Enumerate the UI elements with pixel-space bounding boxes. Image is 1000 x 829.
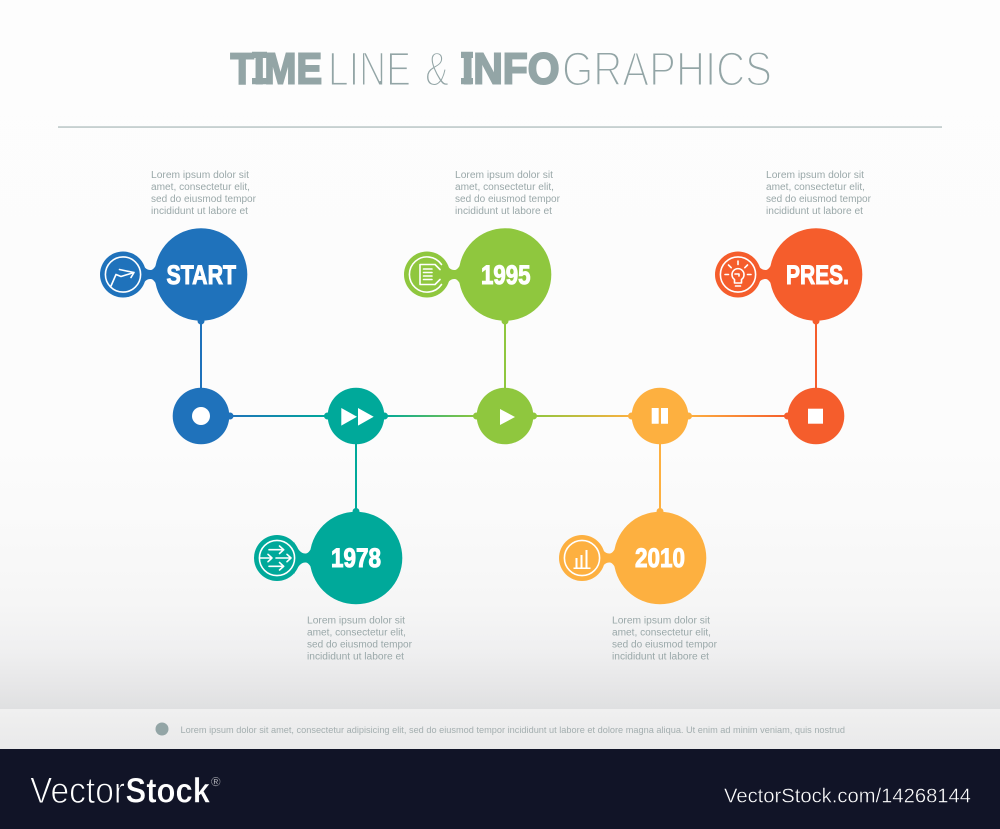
title: TIME: [230, 45, 322, 93]
title: GRAPHICS: [562, 42, 772, 96]
icon: document: [409, 257, 442, 292]
title: [230, 42, 772, 96]
description: start: sed do eiusmod tempor: [151, 194, 257, 205]
footer note bar: [0, 709, 1000, 749]
label: 1995: 1995: [481, 260, 530, 290]
title: INFO: [462, 45, 560, 93]
stem: 2010: [628, 412, 692, 515]
description: 1978: [307, 616, 413, 662]
node: fast forward: [328, 388, 384, 444]
description: start: incididunt ut labore et: [151, 206, 248, 217]
description: 1978: amet, consectetur elit,: [307, 628, 406, 638]
icon: growth chart: [105, 257, 141, 292]
node: stop: [788, 388, 844, 444]
label: start: START: [166, 260, 236, 290]
icon: light bulb: [720, 257, 756, 292]
bubble: present: [715, 228, 862, 321]
watermark band: [0, 749, 1000, 829]
panel: 1978: [254, 388, 413, 662]
description: 1995: incididunt ut labore et: [455, 206, 552, 217]
description: start: Lorem ipsum dolor sit: [151, 170, 249, 181]
description: 2010: amet, consectetur elit,: [612, 628, 711, 638]
label: 2010: 2010: [635, 543, 685, 573]
node: pause: [632, 388, 688, 444]
title: LINE: [328, 42, 411, 96]
logo: [30, 770, 221, 811]
bubble: 1978: [254, 512, 402, 604]
description: 1995: [455, 170, 561, 217]
bubble: start: [100, 228, 247, 321]
label: 1978: 1978: [331, 543, 381, 573]
description: 2010: [612, 616, 718, 662]
description: 1995: Lorem ipsum dolor sit: [455, 170, 553, 181]
image id: VectorStock.com/14268144: [724, 786, 971, 808]
description: start: [151, 170, 257, 217]
description: start: amet, consectetur elit,: [151, 182, 250, 193]
description: 2010: Lorem ipsum dolor sit: [612, 616, 710, 626]
label: present: PRES.: [786, 260, 849, 290]
node: play: [477, 388, 533, 444]
description: 2010: sed do eiusmod tempor: [612, 640, 718, 650]
description: present: incididunt ut labore et: [766, 206, 863, 217]
panel: 2010: [559, 388, 718, 662]
stem: 1978: [324, 412, 388, 515]
footer bullet: [156, 722, 168, 736]
icon: arrows: [259, 540, 295, 576]
panel: 1995: [404, 170, 561, 444]
description: present: Lorem ipsum dolor sit: [766, 170, 864, 181]
description: 1978: incididunt ut labore et: [307, 652, 404, 662]
description: present: amet, consectetur elit,: [766, 182, 865, 193]
horizontal timeline connectors: [229, 415, 788, 417]
icon: bar chart: [564, 540, 600, 576]
panel: start: [100, 170, 257, 444]
stem: 1995: [473, 318, 537, 420]
description: 1995: sed do eiusmod tempor: [455, 194, 561, 205]
bubble: 2010: [559, 512, 706, 604]
stem: start: [198, 318, 234, 420]
logo: Stock: [126, 772, 210, 810]
description: 2010: incididunt ut labore et: [612, 652, 709, 662]
node: record: [173, 388, 229, 444]
logo: ®: [211, 774, 221, 789]
description: present: sed do eiusmod tempor: [766, 194, 872, 205]
title: &: [425, 42, 449, 96]
logo: Vector: [30, 770, 125, 811]
description: 1978: Lorem ipsum dolor sit: [307, 616, 405, 626]
description: 1995: amet, consectetur elit,: [455, 182, 554, 193]
panel: present: [715, 170, 872, 444]
bubble: 1995: [404, 228, 551, 321]
description: present: [766, 170, 872, 217]
footer text: Lorem ipsum dolor sit amet, consectetur adipisicing elit, sed do eiusmod tempor incididunt ut labore et dolore magna aliqua. Ut enim ad minim veniam, quis nostrud: [180, 725, 845, 736]
description: 1978: sed do eiusmod tempor: [307, 640, 413, 650]
stem: present: [784, 318, 820, 420]
